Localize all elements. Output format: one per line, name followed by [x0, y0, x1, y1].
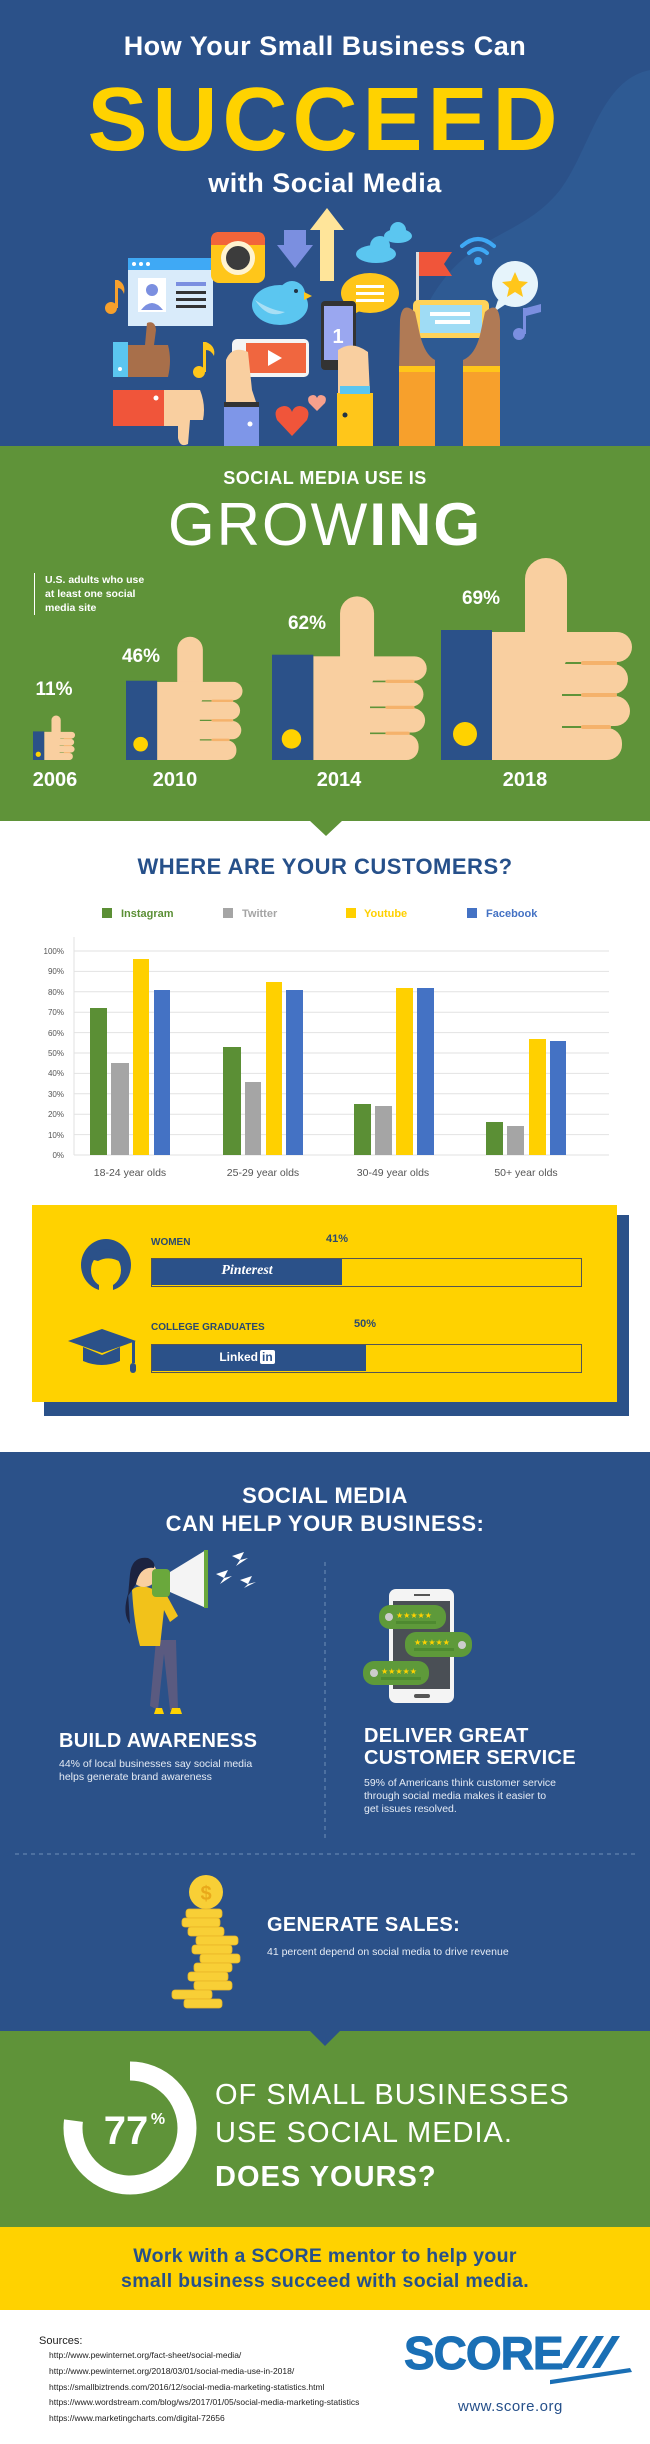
- icon: clouds: [356, 222, 412, 263]
- icon: down arrow: [277, 230, 313, 268]
- icon: bird: [252, 281, 312, 325]
- icon: woman: [81, 1239, 131, 1290]
- text: sources: http://www.pewinternet.org/fact-sheet/social-media/: [49, 2350, 241, 2360]
- labels: years: 2014: [317, 769, 362, 791]
- icon: music note purple: [513, 304, 541, 340]
- divider lines: [15, 1562, 635, 1854]
- text: sources: http://www.pewinternet.org/2018/03/01/social-media-use-in-2018/: [49, 2366, 294, 2376]
- category labels: 50+ year olds: [494, 1167, 558, 1179]
- legend: [102, 908, 538, 920]
- legend: Youtube: [364, 908, 407, 920]
- text: build awareness: BUILD AWARENESS: [59, 1730, 257, 1752]
- text: deliver great customer service: CUSTOMER SERVICE: [364, 1747, 576, 1769]
- chart: 77% ring: %: [151, 2111, 165, 2128]
- text: of small businesses: OF SMALL BUSINESSES: [215, 2079, 570, 2111]
- labels: percentages: [36, 588, 500, 700]
- text: sources: Sources:: [39, 2335, 82, 2347]
- text: of small businesses: [215, 2079, 570, 2193]
- axis labels: 90%: [48, 967, 64, 976]
- illustration: phone with reviews: [363, 1589, 472, 1703]
- text: of small businesses: DOES YOURS?: [215, 2161, 437, 2193]
- text: deliver great customer service: [364, 1725, 576, 1815]
- caption: U.S. adults: [34, 573, 174, 615]
- text: sources: [39, 2335, 360, 2423]
- labels: percentages: 69%: [462, 588, 500, 609]
- heading: social media can help your business: SOCIAL MEDIA: [242, 1483, 408, 1508]
- text: generate sales: 41 percent depend on social media to drive revenue: [267, 1946, 509, 1958]
- icon: video player with hand: [224, 339, 309, 446]
- icon: hands holding horizontal phone: [399, 300, 500, 446]
- chart: 77% ring: [64, 2062, 196, 2194]
- arrow: blue notch over green: [310, 2031, 340, 2046]
- category labels: [94, 1167, 558, 1179]
- icon: phone with hand: [321, 301, 373, 446]
- illustration: woman with megaphone: [125, 1550, 256, 1714]
- label: college graduates: COLLEGE GRADUATES: [151, 1322, 265, 1333]
- chart: thumbs-up growth: [33, 558, 632, 791]
- axis labels: 40%: [48, 1069, 64, 1078]
- axis labels: 100%: [44, 947, 64, 956]
- text: deliver great customer service: DELIVER GREAT: [364, 1725, 529, 1747]
- illustration: phone with reviews: ★★★★★: [414, 1638, 450, 1647]
- icon: flag: [416, 252, 452, 302]
- bar: pinterest: [151, 1258, 582, 1287]
- labels: percentages: 11%: [36, 679, 73, 700]
- illustration: phone with reviews: ★★★★★: [381, 1667, 417, 1676]
- axis labels: 10%: [48, 1131, 64, 1140]
- heading: GROWING: GROWING: [168, 491, 482, 558]
- text: generate sales: GENERATE SALES:: [267, 1914, 460, 1936]
- text: sources: https://www.wordstream.com/blog/ws/2017/01/05/social-media-marketing-statistics: [49, 2397, 359, 2407]
- value: 50%: 50%: [354, 1318, 376, 1330]
- heading: social media can help your business: [166, 1483, 484, 1536]
- icon: yellow chat bubble: [341, 273, 399, 318]
- value: 41%: 41%: [326, 1233, 348, 1245]
- icon: thumbs down: [113, 390, 204, 445]
- logo: SCORE: SCORE: [404, 2327, 563, 2379]
- icon: thumbs up brown: [113, 322, 170, 377]
- bars: 50+: [486, 1039, 566, 1155]
- thumb 2014: [272, 596, 427, 760]
- heading: social media use is: SOCIAL MEDIA USE IS: [223, 468, 427, 488]
- illustration: coin stack: [172, 1875, 240, 2008]
- chart: 77% ring: 77: [104, 2109, 148, 2153]
- category labels: 30-49 year olds: [357, 1167, 429, 1179]
- heading: where are your customers: WHERE ARE YOUR CUSTOMERS?: [137, 854, 513, 879]
- axis labels: 70%: [48, 1008, 64, 1017]
- icon: wifi: [462, 239, 494, 263]
- axis labels: 80%: [48, 988, 64, 997]
- section: mentor callout: [0, 2227, 650, 2310]
- labels: percentages: 62%: [288, 613, 326, 634]
- legend: Instagram: [121, 908, 174, 920]
- category labels: 25-29 year olds: [227, 1167, 299, 1179]
- icon: hearts: [276, 395, 326, 436]
- icon: music note yellow: [193, 342, 214, 378]
- arrow: green notch: [310, 821, 342, 836]
- icon: up arrow: [310, 208, 344, 281]
- section: 77% stat: [0, 2031, 650, 2227]
- text: of small businesses: USE SOCIAL MEDIA.: [215, 2117, 513, 2149]
- icon: music note orange: [105, 280, 124, 314]
- title: line 1: How Your Small Business Can: [124, 31, 526, 61]
- bars: 30-49: [354, 988, 434, 1155]
- icon: star bubble: [492, 261, 538, 312]
- legend: Twitter: [242, 908, 278, 920]
- illustration: phone with reviews: ★★★★★: [396, 1611, 432, 1620]
- axis labels: [44, 947, 64, 1160]
- thumb 2006: [33, 716, 75, 760]
- labels: years: 2006: [33, 769, 77, 791]
- axis labels: 60%: [48, 1029, 64, 1038]
- bar chart: platform use by age: [44, 908, 609, 1179]
- heading: social media can help your business: CAN HELP YOUR BUSINESS:: [166, 1511, 484, 1536]
- decorative wave: [421, 70, 650, 446]
- caption: U.S. adults: at least one social: [45, 588, 135, 600]
- icon: browser profile window: [128, 258, 213, 326]
- bar: linkedin: [151, 1344, 582, 1373]
- caption: U.S. adults: U.S. adults who use: [45, 574, 144, 586]
- panel: women & graduates: [32, 1205, 629, 1416]
- illustration: coin stack: $: [200, 1883, 212, 1905]
- label: women: WOMEN: [151, 1237, 190, 1248]
- text: deliver great customer service: through social media makes it easier to: [364, 1790, 546, 1802]
- bars: 18-24: [90, 959, 170, 1155]
- bar: linkedin: Linked in: [219, 1350, 273, 1364]
- icon: camera: [211, 232, 265, 283]
- title: line 3: with Social Media: [208, 168, 442, 198]
- caption: U.S. adults: media site: [45, 602, 96, 614]
- section: header background: [0, 0, 650, 446]
- text: www.score.org: www.score.org: [458, 2398, 563, 2415]
- axis labels: 30%: [48, 1090, 64, 1099]
- bars: 25-29: [223, 982, 303, 1155]
- section: growing (green): [0, 446, 650, 821]
- axis labels: 20%: [48, 1110, 64, 1119]
- section: social media can help: [0, 1452, 650, 2031]
- text: sources: https://www.marketingcharts.com/digital-72656: [49, 2413, 225, 2423]
- category labels: 18-24 year olds: [94, 1167, 166, 1179]
- labels: years: [33, 769, 547, 791]
- section: mentor callout: small business succeed with social media.: [121, 2270, 529, 2292]
- axis labels: 0%: [52, 1151, 64, 1160]
- icon: phone with hand: 1: [332, 326, 344, 348]
- legend: Facebook: [486, 908, 538, 920]
- text: generate sales: [267, 1914, 509, 1958]
- icon: graduation cap: [68, 1329, 136, 1373]
- text: build awareness: 44% of local businesses say social media: [59, 1758, 252, 1770]
- text: deliver great customer service: 59% of Americans think customer service: [364, 1777, 556, 1789]
- title: SUCCEED: SUCCEED: [87, 70, 563, 170]
- thumb 2010: [126, 637, 243, 760]
- illustration: social media icons cluster: [105, 208, 541, 446]
- labels: percentages: 46%: [122, 646, 160, 667]
- bar: pinterest: Pinterest: [221, 1263, 273, 1278]
- labels: years: 2010: [153, 769, 197, 791]
- logo: SCORE: [404, 2327, 632, 2415]
- labels: years: 2018: [503, 769, 547, 791]
- thumb 2018: [441, 558, 632, 760]
- text: sources: https://smallbiztrends.com/2016/12/social-media-marketing-statistics.html: [49, 2382, 324, 2392]
- section: mentor callout: Work with a SCORE mentor to help your: [133, 2245, 517, 2267]
- text: build awareness: [59, 1730, 257, 1783]
- text: deliver great customer service: get issues resolved.: [364, 1803, 457, 1815]
- arrow: blue notch: [309, 2030, 341, 2047]
- text: build awareness: helps generate brand awareness: [59, 1771, 212, 1783]
- axis labels: 50%: [48, 1049, 64, 1058]
